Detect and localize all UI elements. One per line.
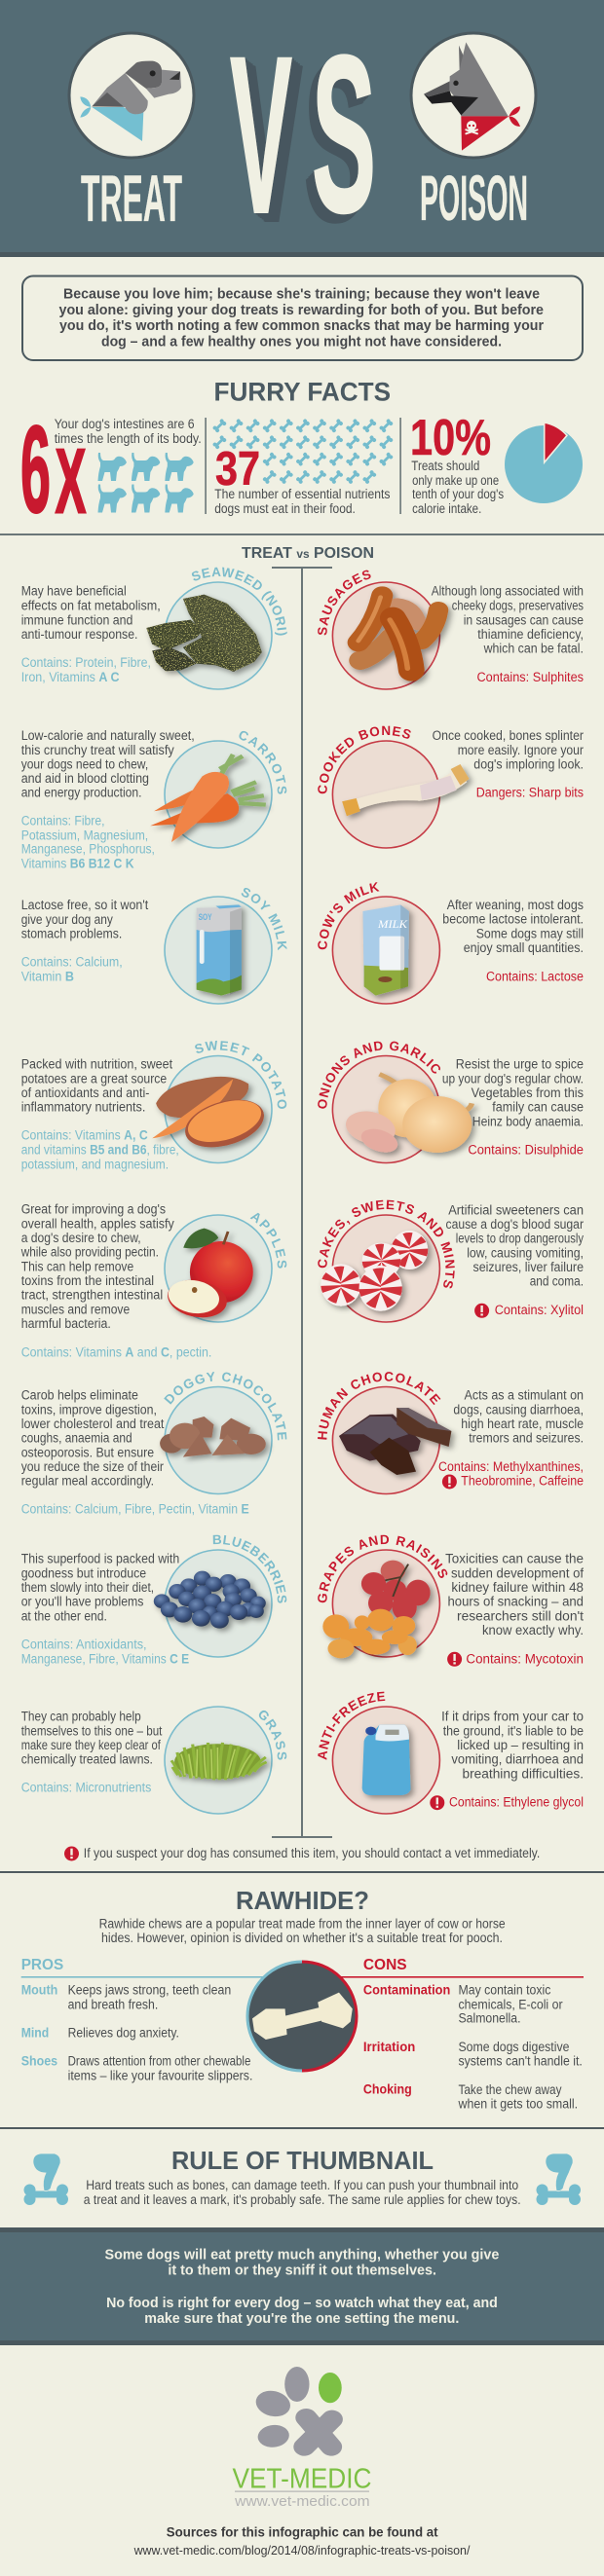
grass text: themselves to this one – but [21,1723,163,1738]
panel: cakes, sweets and mints [318,1199,584,1323]
cons column: chemicals, E-coli or [458,1997,563,2011]
cow's milk contains: Contains: Lactose [486,969,584,983]
carrots contains: Contains: Fibre, [21,814,105,828]
blueberries text: them slowly into their diet, [21,1580,154,1595]
soy milk contains: Contains: Calcium, [21,955,123,970]
blueberries contains [21,1638,189,1666]
onions text [442,1057,584,1128]
cons column: Salmonella. [458,2011,520,2026]
doggy chocolate text: lower cholesterol and treat [21,1417,165,1431]
panel: 6x fact [20,400,202,538]
intro box: dog – and a few healthy ones you might not have considered. [101,335,502,350]
panel: 6x fact: X [56,430,86,532]
icon: seaweed [146,595,262,672]
human chocolate contains with warning icon: Theobromine, Caffeine [461,1474,584,1489]
cons column: Choking [363,2082,412,2097]
panel: closing band [0,2227,604,2345]
anti-freeze circle and label [318,1692,440,1815]
cow's milk circle and label: COW'S MILK [318,882,380,950]
carrots contains: Vitamins B6 B12 C K [21,857,134,871]
icon: soy milk carton [197,904,242,996]
grass circle and label [164,1706,286,1815]
sweet potato text: of antioxidants and anti- [21,1086,149,1100]
icon: chocolate [339,1408,451,1475]
onions text: family can cause [492,1100,584,1115]
apples text: This can help remove [21,1259,133,1273]
human chocolate circle and label [318,1372,440,1495]
grapes text: researchers still don't [457,1608,584,1623]
soy milk text: stomach problems. [21,926,122,940]
sweet potato circle and label: SWEET POTATO [195,1040,286,1109]
human chocolate contains with warning icon: Contains: Methylxanthines, [438,1459,584,1474]
header panel: S [312,9,376,259]
soy milk text: Lactose free, so it won't [21,898,148,912]
icon: soy milk carton: SOY [199,912,212,922]
carrots contains: Potassium, Magnesium, [21,828,148,843]
logo url: www.vet-medic.com [234,2493,370,2510]
doggy chocolate text: toxins, improve digestion, [21,1403,157,1417]
blueberries text: or you'll have problems [21,1595,144,1609]
panel: blueberries [21,1534,286,1667]
intro box: you alone: giving your dog treats is rewarding for both of you. But before [58,303,544,318]
sweet potato contains: potassium, and magnesium. [21,1157,169,1171]
cons column: CONS [363,1957,407,1973]
panel: closing band: No food is right for every dog – so watch what they eat, and [106,2296,498,2311]
heading: rule of thumbnail: RULE OF THUMBNAIL [171,2146,434,2175]
seaweed contains: Iron, Vitamins A C [21,670,120,684]
cons column: Contamination [363,1982,450,1997]
icon: thumb and bone right [536,2153,581,2205]
cow's milk text: enjoy small quantities. [464,940,584,955]
cow's milk circle and label [318,882,440,1005]
icon: treat dog [69,33,194,158]
doggy chocolate circle and label: DOGGY CHOCOLATE [164,1372,286,1441]
header panel: TREAT [81,162,182,236]
soy milk contains: Vitamin B [21,969,74,983]
seaweed text: May have beneficial [21,584,127,599]
header panel [0,0,604,260]
apples text: overall health, apples satisfy [21,1217,174,1232]
sweet potato contains: Contains: Vitamins A, C [21,1128,148,1143]
cow's milk text: After weaning, most dogs [447,898,584,912]
doggy chocolate text: you reduce the size of their [21,1459,164,1474]
sweet potato circle and label [164,1040,286,1164]
sausages text: which can be fatal. [483,642,584,656]
sausages text: in sausages can cause [464,613,584,628]
panel: grass [21,1706,286,1815]
icon: grapes and raisins [322,1561,431,1658]
seaweed circle and label [166,567,287,690]
carrots text: your dogs need to chew, [21,756,148,771]
cons column [339,1957,584,2112]
panel: onions and garlic [318,1042,584,1164]
icon: thumb and bone left [23,2153,68,2205]
onions circle and label [318,1042,440,1164]
cooked bones text: more easily. Ignore your [458,743,584,757]
icon: apple [163,1229,253,1323]
mints text: Artificial sweeteners can [448,1202,584,1217]
soy milk contains [21,955,123,983]
icon: sweet potato [152,1077,273,1157]
icon: sausages [359,596,438,670]
cooked bones text: dog's imploring look. [473,756,584,771]
mints text: cause a dog's blood sugar [446,1217,584,1232]
blueberries contains: Manganese, Fibre, Vitamins C E [21,1651,189,1666]
carrots contains: Manganese, Phosphorus, [21,842,155,857]
grass text: chemically treated lawns. [21,1752,153,1767]
logo wordmark: VET-MEDIC [232,2464,372,2495]
panel: cooked bones [318,726,584,849]
panel: grapes and raisins [318,1534,585,1667]
heading: furry facts: FURRY FACTS [214,378,391,407]
cooked bones text: Once cooked, bones splinter [433,728,584,743]
heading: treat vs poison: TREAT vs POISON [242,545,374,562]
grapes text: hours of snacking – and [448,1595,584,1609]
heading: rawhide: RAWHIDE? [236,1886,369,1915]
cooked bones text [433,728,584,771]
cooked bones circle and label [318,726,440,849]
rawhide intro [99,1917,506,1945]
pros column: Shoes [21,2054,57,2069]
panel: 37 nutrients fact [212,419,394,516]
seaweed text [21,584,161,642]
panel: sweet potato [21,1040,286,1172]
carrots text: this crunchy treat will satisfy [21,743,174,757]
onions circle and label: ONIONS AND GARLIC [318,1042,440,1109]
doggy chocolate text: coughs, anaemia and [21,1431,132,1446]
grass circle and label: GRASS [259,1710,286,1760]
panel: human chocolate [318,1372,584,1495]
calorie text: Treats should [411,459,479,473]
cons column: Some dogs digestive [458,2040,569,2054]
blueberries circle and label: BLUEBERRIES [212,1534,286,1603]
panel: doggy chocolate [21,1372,286,1517]
anti-freeze circle and label: ANTI-FREEZE [318,1692,386,1760]
panel: rawhide [21,1886,584,2112]
human chocolate circle and label: HUMAN CHOCOLATE [318,1372,440,1440]
apples text: muscles and remove [21,1302,130,1316]
pros column [21,1957,265,2082]
human chocolate text: Acts as a stimulant on [464,1388,584,1403]
centre divider [272,568,332,1837]
anti-freeze text: breathing difficulties. [462,1766,584,1781]
sausages circle and label: SAUSAGES [318,570,371,635]
mints text: seizures, liver failure [473,1260,584,1274]
soy milk text: give your dog any [21,912,113,927]
anti-freeze text: the ground, it's liable to be [443,1723,584,1738]
grapes text: Toxicities can cause the [445,1552,584,1566]
cons column: Take the chew away [458,2082,562,2097]
doggy chocolate text: Carob helps eliminate [21,1388,138,1403]
doggy chocolate text: regular meal accordingly. [21,1474,154,1489]
panel: soy milk [21,888,286,1005]
grass text: make sure they keep clear of [21,1738,161,1752]
pros column: Keeps jaws strong, teeth clean [68,1983,231,1998]
cow's milk text: become lactose intolerant. [442,912,584,927]
rawhide intro: hides. However, opinion is divided on whether it's a suitable treat for pooch. [101,1931,503,1945]
blueberries text: goodness but introduce [21,1565,146,1580]
carrots circle and label [164,730,286,849]
seaweed text: immune function and [21,613,132,628]
carrots text: and energy production. [21,786,142,800]
cons column: May contain toxic [458,1983,551,1998]
icon: cow's milk carton [362,904,409,996]
panel: closing band: Some dogs will eat pretty much anything, whether you give [105,2248,499,2263]
warning note: If you suspect your dog has consumed this item, you should contact a vet immediately. [84,1846,540,1860]
sweet potato contains [21,1128,179,1171]
apples text: harmful bacteria. [21,1316,111,1331]
onions contains: Contains: Disulphide [468,1143,584,1158]
seaweed text: anti-tumour response. [21,627,138,642]
cooked bones dangers: Dangers: Sharp bits [476,786,584,800]
human chocolate text: dogs, causing diarrhoea, [453,1403,584,1417]
pros column: items – like your favourite slippers. [68,2068,252,2082]
icon: cooked bone [342,764,470,816]
doggy chocolate contains: Contains: Calcium, Fibre, Pectin, Vitamin E [21,1502,249,1517]
grapes contains with warning icon: Contains: Mycotoxin [466,1651,584,1666]
apples circle and label: APPLES [249,1213,286,1269]
sweet potato contains: and vitamins B5 and B6, fibre, [21,1143,179,1158]
mints circle and label [318,1199,455,1323]
carrots circle and label: CARROTS [239,730,286,794]
human chocolate contains with warning icon [438,1459,584,1490]
human chocolate text: tremors and seizures. [469,1431,584,1446]
cons column: systems can't handle it. [458,2054,583,2069]
grass text [21,1710,163,1767]
apples text: Great for improving a dog's [21,1202,166,1217]
panel: sausages [318,570,584,690]
sausages text: Although long associated with [432,584,584,599]
onions text: Vegetables from this [472,1086,584,1100]
panel: cow's milk [318,882,584,1005]
doggy chocolate circle and label [164,1372,286,1495]
onions text: up your dog's regular chow. [442,1071,584,1086]
rawhide intro: Rawhide chews are a popular treat made from the inner layer of cow or horse [99,1917,506,1932]
pros column: Mouth [21,1982,57,1997]
panel: seaweed [21,567,287,690]
rawhide bone disc [247,1962,357,2071]
big number 10%: 10% [410,410,491,466]
intro box [22,276,583,360]
pros column: Mind [21,2025,49,2040]
sweet potato text [21,1057,172,1115]
blueberries text [21,1552,179,1623]
carrots text: Low-calorie and naturally sweet, [21,728,195,743]
big number 6x: 6 [20,400,51,538]
apples contains: Contains: Vitamins A and C, pectin. [21,1344,211,1359]
panel: anti-freeze [318,1692,584,1815]
icon: blueberries [154,1571,266,1629]
title word: VS: V [230,10,292,260]
mints text: low, causing vomiting, [467,1246,584,1261]
panel: rule of thumbnail [23,2146,581,2207]
pros column: Relieves dog anxiety. [68,2026,179,2041]
apples circle and label [164,1213,286,1323]
mints text: and coma. [530,1274,584,1289]
doggy chocolate text: osteoporosis. But ensure [21,1445,154,1459]
panel: closing band: make sure that you're the one setting the menu. [144,2311,459,2327]
sausages circle and label [318,570,440,690]
anti-freeze text [441,1710,584,1781]
mints text [446,1202,584,1289]
calorie text: tenth of your dog's [412,487,504,501]
apples text: toxins from the intestinal [21,1273,154,1288]
cow's milk text [442,898,584,955]
icon: carob treats [160,1417,266,1457]
icon: anti-freeze jug [362,1725,410,1795]
sweet potato text: inflammatory nutrients. [21,1100,145,1115]
big number 37: 37 [215,443,260,496]
sweet potato text: potatoes are a great source [21,1071,167,1086]
blueberries circle and label [165,1534,286,1658]
soy milk text [21,898,148,940]
rule text: a treat and it leaves a mark, it's probably safe. The same rule applies for chew toys. [84,2192,521,2207]
human chocolate text: high heart rate, muscle [461,1417,584,1431]
icon: cow's milk carton: MILK [377,917,408,931]
apples text: tract, strengthen intestinal [21,1288,163,1303]
calorie text [411,459,504,516]
soy milk circle and label: SOY MILK [242,888,286,950]
pros column: PROS [21,1957,64,1973]
doggy chocolate text [21,1388,165,1489]
sweet potato text: Packed with nutrition, sweet [21,1057,172,1072]
calorie text: calorie intake. [412,501,481,516]
icon: 37 bones [212,419,394,485]
icon: grass [171,1743,267,1780]
panel: apples [20,1202,286,1359]
grass text: They can probably help [21,1710,141,1724]
sources: www.vet-medic.com/blog/2014/08/infographic-treats-vs-poison/ [133,2543,471,2558]
anti-freeze text: If it drips from your car to [441,1710,584,1724]
grapes circle and label [318,1534,448,1658]
logo: vet-medic [232,2367,372,2510]
carrots contains [21,814,155,871]
cow's milk text: Some dogs may still [476,926,584,940]
icon: paw [251,2367,342,2449]
seaweed text: effects on fat metabolism, [21,599,161,613]
intro box: Because you love him; because she's training; because they won't leave [63,287,540,303]
seaweed circle and label: SEAWEED (NORI) [191,567,287,636]
icon: onions and garlic [340,1074,472,1157]
grapes circle and label: GRAPES AND RAISINS [318,1534,448,1602]
apples text [20,1202,174,1331]
grass contains: Contains: Micronutrients [21,1781,152,1795]
rule text: Hard treats such as bones, can damage teeth. If you can push your thumbnail into [86,2178,518,2192]
blueberries contains: Contains: Antioxidants, [21,1638,147,1652]
sources [133,2524,471,2558]
carrots text [21,728,195,800]
calorie text: only make up one [412,473,499,488]
icon: carrots [150,754,266,842]
pros column: and breath fresh. [68,1997,158,2011]
panel: 10% fact [410,410,583,516]
sausages text [432,584,584,656]
sausages text: thiamine deficiency, [477,627,584,642]
anti-freeze text: vomiting, diarrhoea and [451,1752,584,1767]
onions text: Heinz body anaemia. [472,1114,584,1128]
cooked bones circle and label: COOKED BONES [318,726,411,794]
cons column: Irritation [363,2040,415,2054]
seaweed contains: Contains: Protein, Fibre, [21,655,151,670]
onions text: Resist the urge to spice [456,1057,584,1072]
mints contains with warning icon: Contains: Xylitol [495,1303,584,1317]
grapes text: sudden development of [451,1565,584,1580]
blueberries text: at the other end. [21,1608,107,1623]
mints circle and label: CAKES, SWEETS AND MINTS [318,1199,455,1289]
anti-freeze contains with warning icon: Contains: Ethylene glycol [449,1794,584,1809]
rule text [84,2178,521,2207]
grapes text: kidney failure within 48 [451,1580,584,1595]
grapes text: know exactly why. [482,1623,584,1638]
icon: poison dog [411,33,536,158]
apples text: a dog's desire to chew, [21,1231,141,1245]
panel: carrots [21,728,286,871]
intestine text [55,417,202,446]
nutrients text [214,487,391,516]
intestine text: times the length of its body. [55,431,202,446]
cons column: when it gets too small. [458,2097,578,2112]
intro box: you do, it's worth noting a few common snacks that may be harming your [59,318,544,334]
seaweed contains [21,655,151,684]
blueberries text: This superfood is packed with [21,1552,179,1566]
icon: peppermints [321,1231,428,1311]
nutrients text: dogs must eat in their food. [214,501,356,516]
panel: closing band: it to them or they sniff it out themselves. [168,2263,436,2279]
anti-freeze text: licked up – resulting in [457,1738,584,1752]
sources: Sources for this infographic can be found at [167,2524,438,2540]
pie chart [505,423,583,503]
intestine text: Your dog's intestines are 6 [55,417,195,431]
human chocolate text [453,1388,584,1446]
sausages contains: Contains: Sulphites [477,670,584,684]
icon: six dogs [97,453,194,512]
apples text: while also providing pectin. [20,1245,159,1260]
nutrients text: The number of essential nutrients [214,487,391,501]
grapes text [445,1552,584,1638]
soy milk circle and label [164,888,286,1005]
pros column: Draws attention from other chewable [68,2054,250,2069]
carrots text: and aid in blood clotting [21,771,149,786]
